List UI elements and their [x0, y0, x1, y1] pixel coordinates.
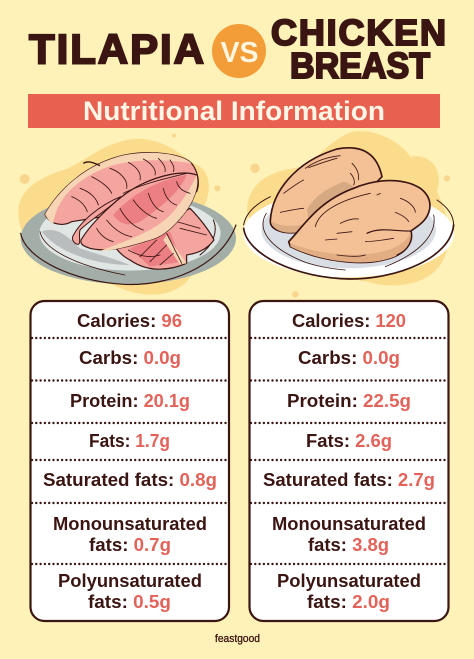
- row: calories: Calories: 96: [77, 311, 182, 331]
- row: monounsaturated fats: Monounsaturated: [272, 514, 426, 534]
- row: monounsaturated fats: fats: 0.7g: [89, 535, 171, 555]
- back fillet: [45, 153, 198, 224]
- row: fats: Fats: 2.6g: [306, 431, 392, 451]
- row: polyunsaturated fats: [277, 571, 421, 612]
- row: calories: Calories: 120: [292, 311, 406, 331]
- row: carbs: Carbs: 0.0g: [79, 348, 181, 368]
- title: [29, 12, 446, 86]
- banner: nutritional information: [28, 94, 440, 128]
- badge: vs: [212, 24, 266, 78]
- back breast: [270, 148, 382, 233]
- title: breast: BREAST: [290, 45, 430, 86]
- row: polyunsaturated fats: [58, 571, 202, 612]
- panel: tilapia nutrition: [30, 301, 229, 621]
- row: saturated fats: Saturated fats: 2.7g: [263, 470, 435, 490]
- front breast: [289, 181, 430, 262]
- title: tilapia: TILAPIA: [29, 26, 204, 72]
- row: monounsaturated fats: fats: 3.8g: [308, 535, 389, 555]
- row: polyunsaturated fats: fats: 2.0g: [307, 592, 390, 612]
- row: polyunsaturated fats: fats: 0.5g: [88, 592, 171, 612]
- row: polyunsaturated fats: Polyunsaturated: [277, 571, 421, 591]
- row: monounsaturated fats: [53, 514, 207, 555]
- bottom fillet: [117, 208, 214, 269]
- badge: vs: VS: [220, 37, 258, 69]
- banner: nutritional information: Nutritional Information: [83, 96, 385, 126]
- footer logo: feastgood: feastgood: [215, 633, 260, 645]
- title: chicken: CHICKEN: [271, 12, 446, 53]
- row: protein: Protein: 20.1g: [70, 391, 190, 411]
- front fillet: [81, 173, 197, 250]
- row: carbs: Carbs: 0.0g: [298, 348, 400, 368]
- row: monounsaturated fats: Monounsaturated: [53, 514, 207, 534]
- row: protein: Protein: 22.5g: [287, 391, 411, 411]
- row: fats: Fats: 1.7g: [89, 431, 170, 451]
- row: saturated fats: Saturated fats: 0.8g: [43, 470, 217, 490]
- panel: chicken breast nutrition: [250, 301, 448, 621]
- illustration: tilapia on plate: [18, 134, 236, 295]
- row: polyunsaturated fats: Polyunsaturated: [58, 571, 202, 591]
- row: monounsaturated fats: [272, 514, 426, 555]
- illustration: chicken breast on plate: [243, 131, 454, 298]
